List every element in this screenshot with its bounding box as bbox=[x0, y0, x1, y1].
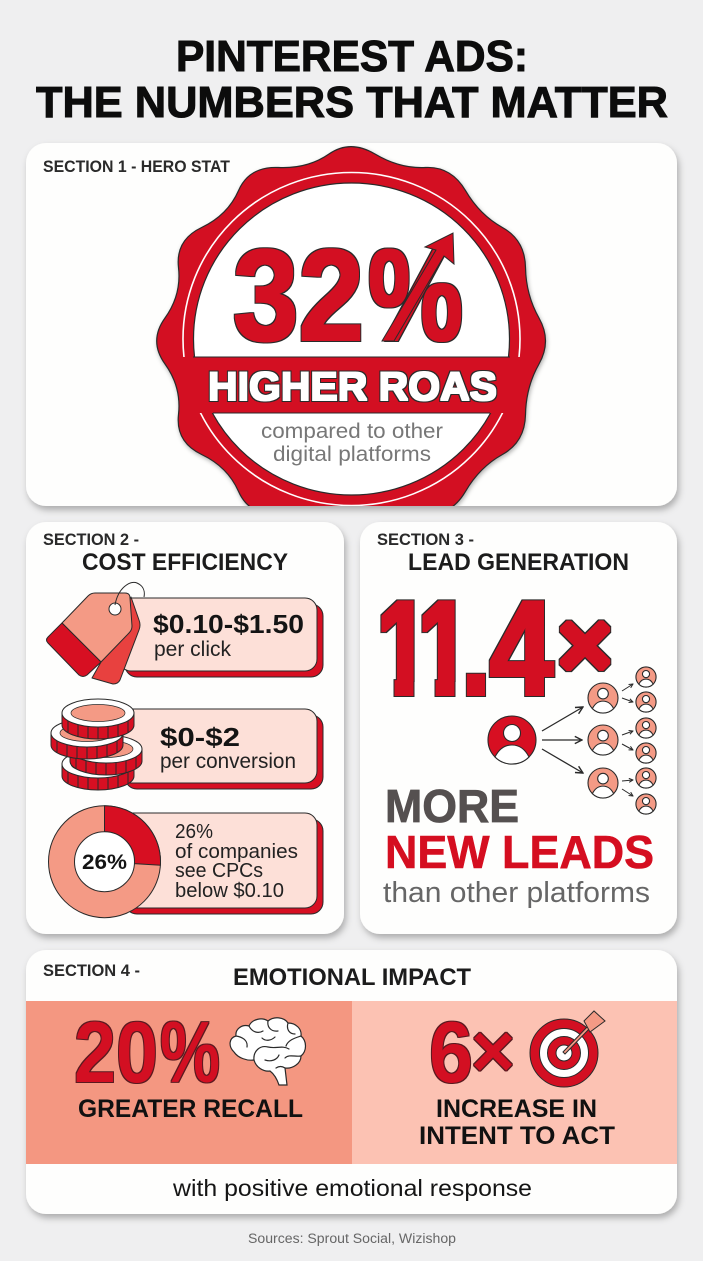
icon: target with arrow bbox=[530, 1011, 605, 1087]
intent caption bbox=[419, 1095, 615, 1150]
cpc caption bbox=[175, 821, 298, 902]
icon: rising arrow bbox=[382, 233, 454, 341]
big number 11.4x: × bbox=[558, 592, 612, 697]
big number 32%: % bbox=[368, 222, 463, 368]
section 1 label: SECTION 1 - HERO STAT bbox=[43, 158, 230, 176]
big number 11.4x: 1 bbox=[418, 572, 470, 724]
sources: Sources: Sprout Social, Wizishop bbox=[248, 1231, 456, 1246]
higher roas label: HIGHER ROAS bbox=[208, 365, 497, 409]
cost row: low cpc share bbox=[48, 806, 323, 918]
section 4 label: SECTION 4 - bbox=[43, 962, 140, 980]
section 3 heading: LEAD GENERATION bbox=[408, 549, 629, 576]
cpc caption: 26% bbox=[175, 821, 213, 843]
more new leads statement bbox=[383, 780, 654, 909]
intent number: × bbox=[471, 1009, 515, 1094]
stat block: intent to act bbox=[352, 1001, 677, 1164]
icon: coin stack bbox=[51, 699, 142, 790]
scalloped badge bbox=[157, 147, 546, 535]
icon: price tags bbox=[46, 582, 144, 684]
more new leads statement: than other platforms bbox=[383, 877, 650, 909]
comparison caption: compared to other bbox=[261, 419, 443, 443]
intent number bbox=[429, 1005, 515, 1101]
cost row: per click bbox=[46, 582, 323, 684]
recall number bbox=[74, 1005, 220, 1101]
per conversion caption: per conversion bbox=[160, 750, 296, 773]
big number 32% bbox=[233, 222, 463, 368]
big number 11.4x bbox=[380, 599, 612, 697]
big number 11.4x: 1 bbox=[377, 572, 429, 724]
cpc caption: below $0.10 bbox=[175, 880, 284, 902]
intent number: 6 bbox=[429, 1005, 473, 1101]
big number 11.4x: . bbox=[462, 572, 490, 724]
panel: section 3 lead generation bbox=[360, 522, 677, 934]
price per click: $0.10-$1.50 bbox=[153, 609, 304, 639]
section 4 heading: EMOTIONAL IMPACT bbox=[233, 964, 471, 991]
footer caption of panel: with positive emotional response bbox=[172, 1175, 532, 1201]
section 2 heading: COST EFFICIENCY bbox=[82, 549, 288, 576]
panel: section 2 cost efficiency bbox=[26, 522, 344, 934]
panel: section 1 hero stat bbox=[26, 143, 677, 535]
title bbox=[36, 32, 668, 127]
more new leads statement: MORE bbox=[385, 780, 519, 832]
intent caption: INCREASE IN bbox=[436, 1095, 597, 1123]
price per conversion: $0-$2 bbox=[160, 722, 240, 752]
per click caption: per click bbox=[154, 638, 231, 661]
comparison caption bbox=[261, 419, 443, 466]
intent caption: INTENT TO ACT bbox=[419, 1122, 615, 1150]
recall number: 20 bbox=[74, 1005, 158, 1101]
recall caption: GREATER RECALL bbox=[78, 1095, 303, 1123]
panel: section 4 emotional impact bbox=[26, 950, 677, 1214]
recall number: % bbox=[160, 1005, 220, 1101]
big number 11.4x: 4 bbox=[490, 572, 553, 724]
donut chart: 26%: 26% bbox=[82, 850, 127, 874]
cpc caption: see CPCs bbox=[175, 860, 263, 882]
section 3 label: SECTION 3 - bbox=[377, 531, 474, 549]
comparison caption: digital platforms bbox=[273, 442, 431, 466]
more new leads statement: NEW LEADS bbox=[385, 826, 654, 878]
lead network diagram bbox=[488, 667, 656, 814]
donut chart: 26% bbox=[48, 806, 161, 918]
stat block: greater recall bbox=[26, 1001, 352, 1164]
icon: brain bbox=[230, 1018, 306, 1085]
cpc caption: of companies bbox=[175, 841, 298, 863]
title: PINTEREST ADS: bbox=[176, 32, 528, 81]
big number 32%: 32 bbox=[233, 222, 364, 368]
title: THE NUMBERS THAT MATTER bbox=[36, 78, 668, 127]
section 2 label: SECTION 2 - bbox=[43, 531, 139, 549]
cost row: per conversion bbox=[51, 699, 323, 790]
